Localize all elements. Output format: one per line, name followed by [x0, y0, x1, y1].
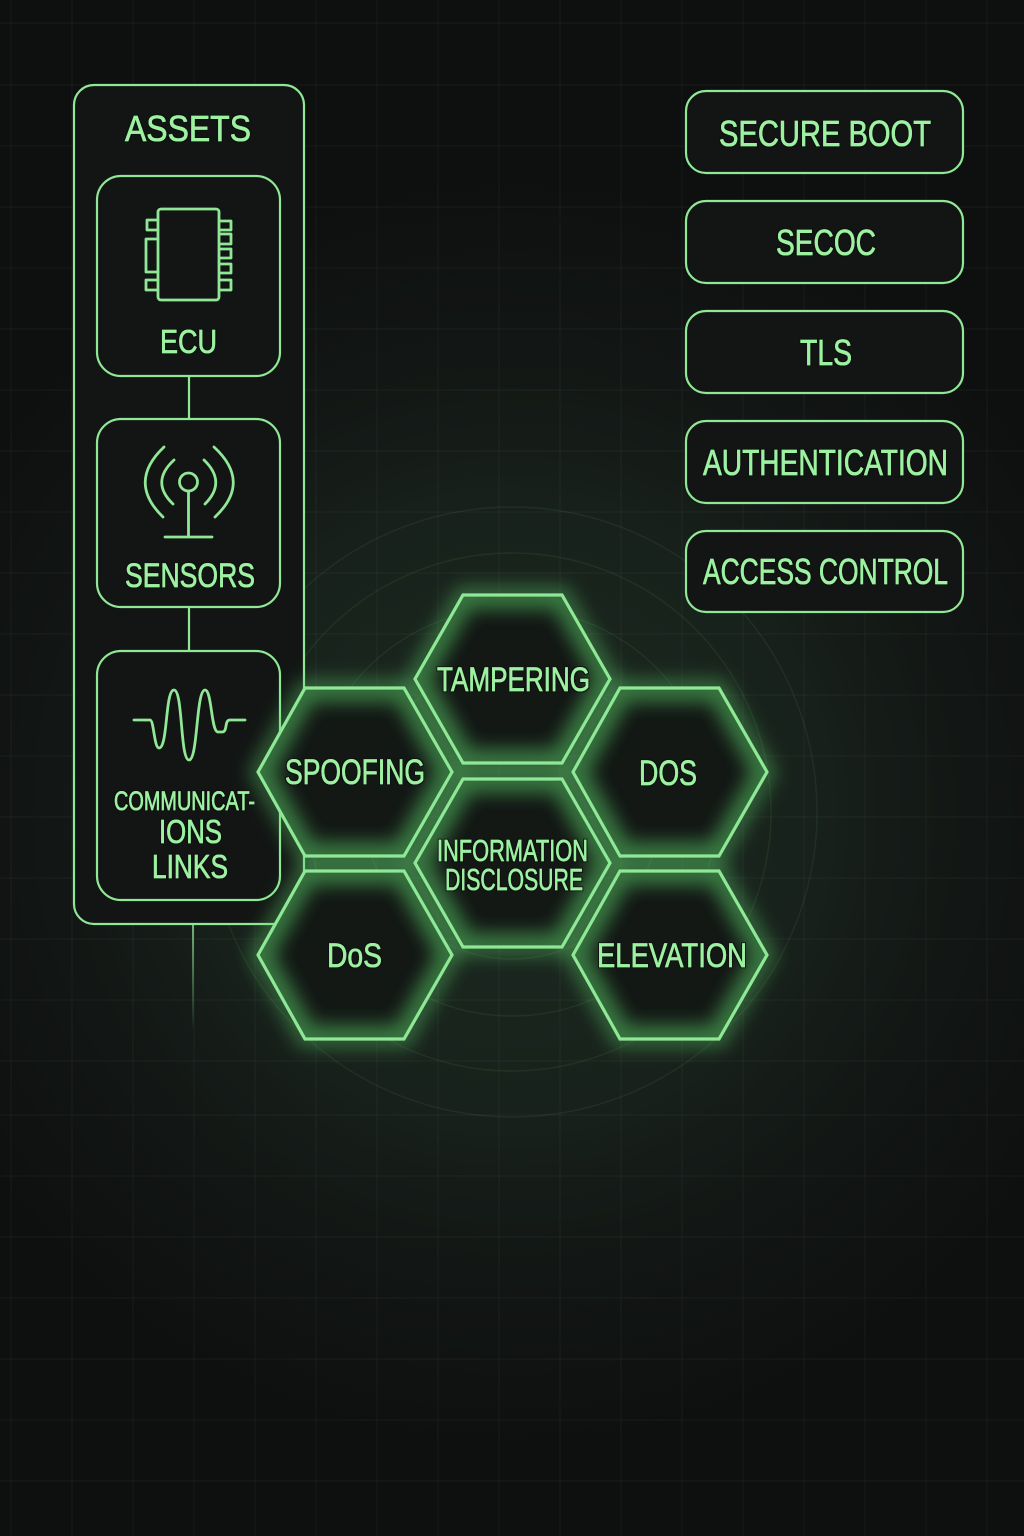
threat hexagon cluster: [258, 595, 767, 1039]
control: access control: [686, 531, 963, 612]
hexagon: spoofing: SPOOFING: [285, 753, 425, 792]
control: secure boot: SECURE BOOT: [719, 113, 931, 154]
label: communications links: LINKS: [152, 848, 228, 885]
control: SecOC: SECOC: [776, 222, 876, 263]
icon: antenna sensor: [145, 447, 233, 537]
hexagon: information disclosure: [415, 779, 610, 947]
hexagon: information disclosure: INFORMATION: [437, 833, 588, 868]
control: SecOC: [686, 201, 963, 283]
control: TLS: [686, 311, 963, 393]
label: ECU: ECU: [160, 323, 217, 360]
control: authentication: [686, 421, 963, 503]
hexagon: DoS: DoS: [327, 937, 382, 975]
hexagon: elevation: [573, 871, 767, 1039]
heading: assets: ASSETS: [125, 108, 251, 149]
label: communications links: IONS: [159, 813, 222, 850]
hexagon: spoofing: [258, 688, 452, 856]
hexagon: DOS: [573, 688, 767, 856]
card: ECU: [97, 176, 280, 376]
label: communications links: [114, 786, 255, 885]
hexagon: information disclosure: DISCLOSURE: [445, 862, 583, 897]
connector: sensors to communications links: [188, 607, 190, 651]
icon: ECU chip: [146, 209, 231, 300]
hexagon: DoS: [258, 871, 452, 1039]
card: communications links: [97, 651, 280, 900]
panel: assets: [74, 85, 304, 924]
security controls list: [686, 91, 963, 612]
connector line below assets panel: [192, 924, 194, 1030]
control: authentication: AUTHENTICATION: [703, 442, 948, 483]
control: TLS: TLS: [800, 332, 852, 373]
label: sensors: SENSORS: [125, 557, 255, 595]
hexagon: elevation: ELEVATION: [597, 937, 747, 975]
hexagon: tampering: [415, 595, 610, 763]
icon: signal waveform: [134, 690, 245, 760]
card: sensors: [97, 419, 280, 607]
hexagon: DOS: DOS: [639, 754, 697, 793]
hexagon: tampering: TAMPERING: [437, 661, 590, 699]
connector: ECU to sensors: [188, 376, 190, 419]
label: communications links: COMMUNICAT-: [114, 786, 255, 816]
control: secure boot: [686, 91, 963, 173]
